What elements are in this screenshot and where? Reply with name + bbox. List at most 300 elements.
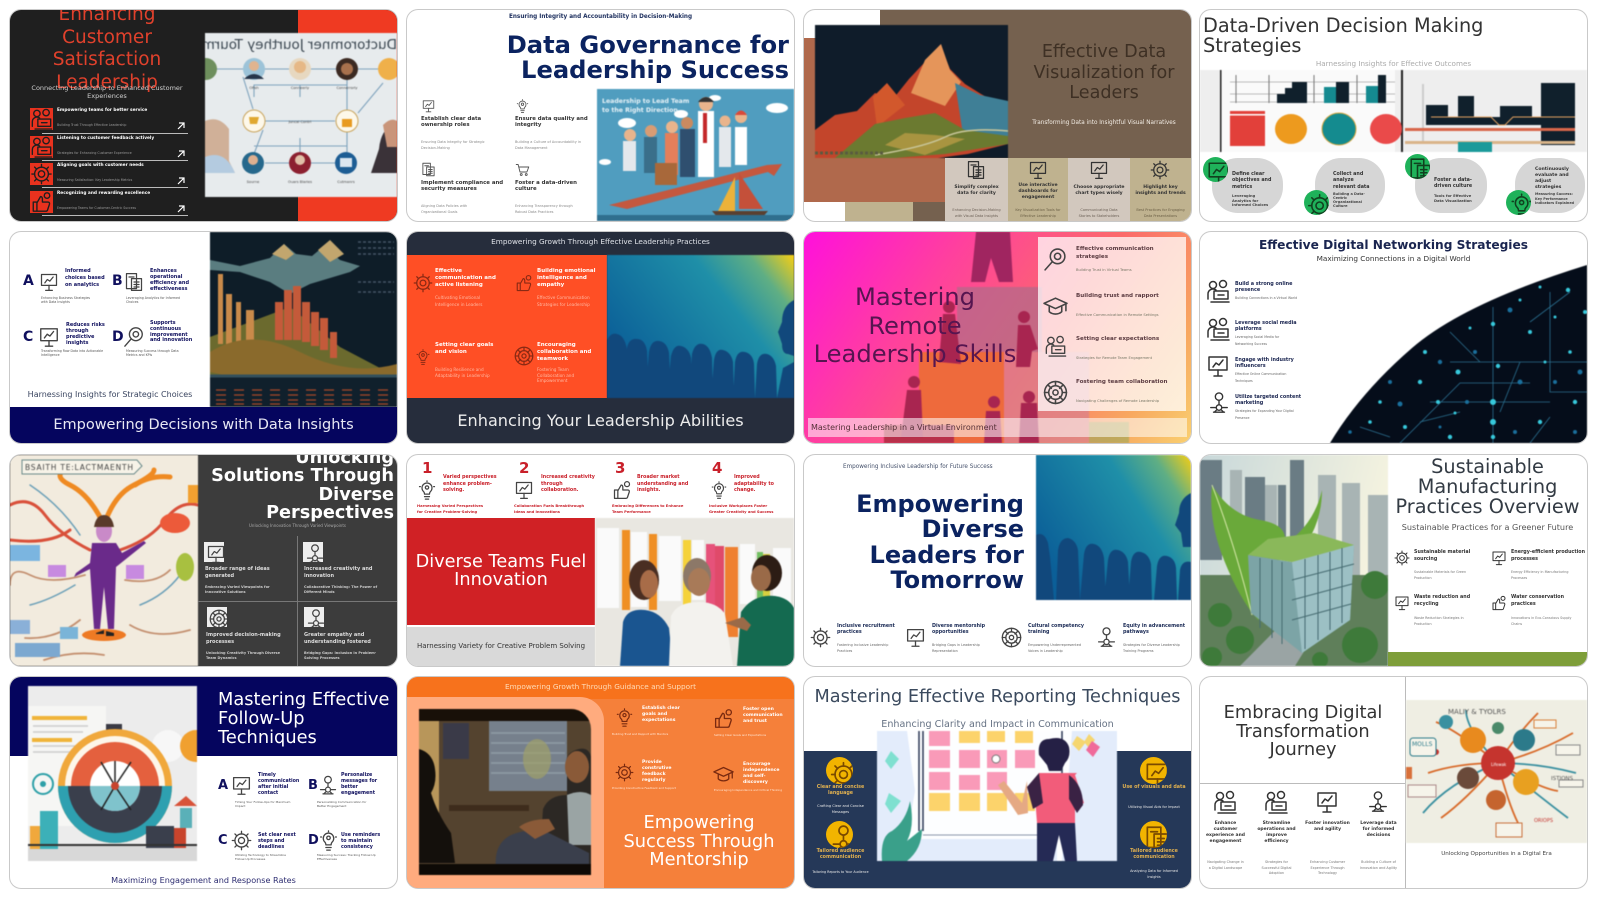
text: Follow-Up Processes [235, 857, 265, 861]
text [952, 208, 1001, 218]
heading [1353, 821, 1404, 839]
title [211, 449, 394, 522]
heading: Define clear [1232, 172, 1264, 177]
heading: Listening to customer feedback actively [57, 136, 154, 141]
text: Strategies for Expanding Your Digital [1235, 409, 1294, 413]
panel: mentorship slide [407, 677, 794, 888]
item 3 [612, 459, 700, 516]
text: Best Practices for Engaging [1136, 208, 1185, 212]
heading: through [66, 328, 89, 334]
heading: Waste reduction and [1414, 595, 1470, 600]
heading [1511, 595, 1564, 608]
heading: communication [258, 779, 299, 784]
panel: data insights slide [10, 232, 397, 443]
heading: Broader market [637, 475, 680, 480]
icon: figure [304, 607, 324, 627]
icon: magnifier [123, 326, 145, 348]
heading: Encouraging [537, 342, 576, 348]
title: Solutions Through [211, 466, 394, 486]
heading: marketing [1235, 400, 1263, 406]
heading: regularly [642, 778, 665, 783]
heading: Aligning goals with customer needs [57, 163, 144, 168]
heading: Tailored audience [1130, 849, 1178, 854]
item: data quality [515, 99, 588, 150]
text [1511, 570, 1568, 581]
image: mind map with figure [10, 455, 198, 666]
text [41, 349, 103, 357]
heading [1434, 178, 1472, 191]
text: Embracing Differences to Enhance [612, 504, 683, 508]
panel: digital transformation slide [1200, 677, 1587, 888]
item: broader range [204, 542, 294, 597]
heading: deadlines [258, 845, 284, 850]
item: content marketing [1206, 391, 1311, 423]
heading: and vision [435, 349, 467, 355]
number: 2 [519, 459, 529, 477]
chart image: dashboards [1200, 70, 1587, 152]
heading: Increased creativity [541, 475, 595, 480]
item: creativity [303, 542, 393, 597]
item: goals [612, 705, 704, 739]
text: Empowering Underrepresented [1028, 643, 1081, 647]
light photo frame [407, 697, 604, 888]
title: Leadership Skills [814, 340, 1016, 368]
heading: efficiency and [150, 280, 189, 286]
text [206, 651, 280, 661]
title: Leaders [1069, 83, 1139, 103]
heading [1235, 320, 1297, 332]
title: Tomorrow [890, 566, 1024, 594]
panel: practices list [1038, 237, 1186, 411]
icon: thumb [515, 274, 533, 292]
text: Enhancing Decision-Making [952, 208, 1001, 212]
heading [1535, 167, 1569, 191]
item C [218, 833, 303, 863]
heading: Leverage data [1360, 821, 1397, 826]
heading: Ensure data quality and [515, 116, 588, 122]
text: Effective Communication [537, 295, 590, 300]
heading: Tailored audience [817, 849, 864, 854]
text [421, 140, 485, 150]
text: Harnessing Varied Perspectives [417, 504, 483, 508]
letter: B [112, 273, 123, 289]
text [932, 643, 980, 654]
text [1200, 860, 1251, 871]
heading: active listening [435, 282, 483, 288]
heading: Establish clear [642, 706, 680, 711]
text [537, 367, 574, 384]
panel: inclusive leadership slide [804, 455, 1191, 666]
text: Indicators Explained [1535, 201, 1574, 205]
text: Effective Online Communication [1235, 372, 1286, 376]
item: key insights [1130, 158, 1191, 221]
item: leverage data [1353, 789, 1404, 881]
text [317, 800, 366, 808]
item: emotional intelligence [514, 268, 604, 308]
text [126, 349, 179, 357]
text: Analytics for [1232, 199, 1258, 203]
heading: Collect and [1333, 172, 1363, 177]
image: silhouettes on gradient [607, 255, 794, 398]
heading: Improved [734, 475, 760, 480]
text: Production [1414, 576, 1432, 580]
heading [541, 475, 595, 495]
icon: report [38, 272, 60, 292]
image: timer gauge illustration [28, 686, 197, 861]
item: define objectives [1203, 154, 1283, 213]
title: Effective Digital Networking Strategies [1259, 238, 1528, 252]
item B [112, 268, 202, 305]
text: Transforming Raw Data into Actionable [41, 349, 103, 353]
title: Mentorship [649, 849, 749, 870]
subtitle: Connecting Leadership to Enhanced Customer [31, 84, 183, 92]
heading: Set clear next [258, 833, 296, 838]
text [435, 295, 482, 308]
text [1232, 194, 1268, 208]
title: Empowering [856, 490, 1024, 518]
image: team on a sailing arrow: Leadership to Lead Team [602, 98, 689, 105]
letter: C [218, 833, 228, 848]
heading [743, 707, 783, 725]
heading: decisions [1367, 833, 1390, 838]
icon: green badge [1405, 154, 1430, 179]
text: Networking Success [1235, 342, 1267, 346]
icon: magnifier [1043, 247, 1068, 272]
heading: independence [743, 768, 779, 773]
heading: Simplify complex [954, 185, 999, 190]
heading: Cultural competency [1028, 624, 1084, 629]
heading: Greater empathy and [304, 632, 364, 638]
heading: Foster a data-driven [515, 180, 577, 186]
panel: customer satisfaction leadership slide [10, 10, 397, 221]
item: chart types [1068, 158, 1130, 221]
heading: driven culture [1434, 184, 1472, 189]
heading [341, 773, 377, 797]
item: aligning goals [30, 162, 188, 188]
title [1200, 704, 1406, 760]
image: customer journey diagram: Ofish [249, 86, 259, 90]
heading [66, 322, 105, 346]
title: Practices Overview [1396, 495, 1579, 518]
text: Organizational Goals [421, 210, 457, 214]
heading [150, 321, 192, 344]
heading: understanding fostered [304, 639, 371, 645]
icon: gear [413, 273, 433, 293]
heading: predictive [66, 334, 94, 340]
heading: data for clarity [957, 191, 996, 196]
text [1130, 207, 1191, 219]
text: Crafting Clear and Concise [817, 804, 864, 808]
heading [1076, 245, 1154, 261]
text: Techniques [1235, 379, 1253, 383]
icon: rosette [514, 346, 534, 366]
heading [1302, 821, 1353, 833]
heading: Use interactive [1018, 183, 1058, 188]
pill [1212, 158, 1283, 213]
text: Measuring Success: Tracking Follow-Up [317, 853, 376, 857]
heading: Empowering teams for better service [57, 108, 147, 113]
heading [515, 116, 588, 128]
item A [218, 773, 303, 810]
text [1511, 616, 1571, 627]
text: Ensuring Data Integrity for Strategic [421, 140, 485, 144]
text: Collaboration and [537, 372, 574, 378]
text [304, 651, 376, 661]
image: digital mind map: Lifewak [1491, 762, 1507, 767]
text: Strategies for Leadership [537, 302, 590, 306]
text: Unlocking Creativity Through Diverse [206, 651, 280, 655]
text: Building a Culture of Accountability in [515, 140, 581, 144]
text: Solving Processes [304, 656, 340, 660]
item: evaluate strategies [1506, 158, 1586, 215]
arrow [178, 122, 185, 130]
heading: chart types wisely [1075, 191, 1123, 196]
text: Measuring Success through Data [126, 349, 179, 353]
icon: bulb [615, 707, 634, 728]
title: Customer [62, 27, 152, 48]
heading: presence [1235, 287, 1260, 293]
text [1117, 869, 1191, 880]
title [53, 10, 161, 93]
heading: to maintain [341, 839, 372, 844]
text: Decision-Making [421, 146, 450, 150]
icon: gold badge figure [826, 821, 853, 848]
icon: board [422, 100, 434, 112]
heading [435, 268, 496, 288]
heading: continuous [150, 326, 181, 332]
subtitle: Maximizing Connections in a Digital World [1317, 254, 1470, 263]
text [1015, 208, 1061, 218]
heading [421, 180, 503, 192]
top band [407, 677, 794, 699]
text: Utilizing Visual Aids for Impact [1128, 805, 1180, 809]
icon: green badge [1304, 190, 1329, 215]
image: digital mind map: ORIOPS [1534, 818, 1553, 824]
heading: engagement [1022, 195, 1054, 200]
item: tailored communication left [804, 821, 877, 877]
heading [65, 268, 105, 288]
text: Choices [126, 300, 138, 304]
heading: efficiency [1264, 839, 1289, 844]
item: online presence [1206, 278, 1311, 304]
icon: rosette [615, 762, 634, 783]
text: Processes [1511, 576, 1527, 580]
heading: Setting clear expectations [1076, 336, 1159, 342]
text [304, 585, 377, 595]
title: Journey [1269, 739, 1337, 760]
text: Navigating Change in [1207, 860, 1244, 864]
text [1535, 192, 1574, 206]
text: Bridging Gaps: Inclusion in Problem- [304, 651, 376, 655]
text: Energy Efficiency in Manufacturing [1511, 570, 1568, 574]
text: Bridging Gaps in Leadership [932, 643, 980, 647]
heading: better [341, 785, 358, 790]
text: Enhancing Business Strategies [41, 296, 90, 300]
item: waste reduction [1394, 595, 1484, 629]
heading: discovery [743, 780, 768, 785]
icon: gear bulb [810, 627, 831, 648]
heading [258, 833, 296, 851]
heading [537, 268, 596, 288]
heading: generated [205, 573, 234, 579]
heading: Varied perspectives [443, 475, 497, 480]
heading: Enhance [1215, 821, 1236, 826]
item: collaboration [514, 342, 604, 390]
text: Innovative Solutions [205, 590, 246, 594]
text: Messages [832, 810, 849, 814]
text: Insights [1147, 875, 1161, 879]
heading: Setting clear goals [435, 342, 493, 348]
letter: A [23, 273, 34, 289]
text: Team Performance [612, 510, 651, 514]
heading: feedback [642, 772, 666, 777]
heading: Building emotional [537, 268, 596, 274]
text: Building a Data- [1333, 192, 1365, 196]
text: Training Programs [1123, 648, 1154, 652]
panel: remote leadership slide [804, 232, 1191, 443]
heading: Recognizing and rewarding excellence [57, 191, 150, 196]
heading: metrics [1232, 185, 1252, 190]
heading: adjust [1535, 179, 1551, 184]
image: mind map with figure: BSAITH TE:LACTMAENTH [25, 463, 133, 472]
image: digital mind map: MOLLS [1412, 741, 1433, 748]
icon: rewards [30, 191, 53, 213]
heading: collaboration. [541, 488, 578, 493]
heading [1414, 550, 1470, 563]
title: Satisfaction [53, 49, 161, 70]
heading: Equity in advancement [1123, 624, 1185, 629]
image: team at planning wall [595, 518, 794, 666]
heading: Building trust and rapport [1076, 293, 1159, 299]
panel: data governance slide [407, 10, 794, 221]
number: 3 [615, 459, 625, 477]
heading [1200, 821, 1251, 845]
image: digital mind map: ISTIONS [1551, 776, 1574, 782]
item: clear goals [412, 342, 502, 382]
item D [308, 833, 393, 863]
text: Key Performance [1535, 196, 1568, 200]
heading: insights. [637, 488, 660, 493]
text: Stories to Stakeholders [1079, 214, 1119, 218]
heading [743, 762, 779, 786]
item: empowering teams [30, 108, 188, 134]
icon: dashboard [1030, 162, 1046, 179]
icon: factory [1491, 550, 1507, 566]
text: Building Resilience and [435, 367, 484, 372]
heading: messages for [341, 779, 377, 784]
image: 3D data mountain [814, 24, 1009, 159]
heading: influencers [1235, 363, 1266, 369]
footer green bar [1388, 652, 1587, 666]
text: Different Minds [304, 590, 335, 594]
image: mentor conversation photo [419, 709, 591, 875]
heading [932, 624, 985, 636]
heading [1511, 550, 1585, 563]
top caption: Empowering Growth Through Effective Leadership Practices [491, 237, 710, 246]
text [514, 504, 584, 515]
heading: operational [150, 274, 182, 280]
text [837, 643, 888, 654]
title [1203, 16, 1483, 56]
subtitle [31, 84, 183, 100]
title: Leadership [56, 72, 158, 93]
text: Empowerment [537, 378, 568, 383]
text: Inclusive Workplaces Foster [709, 504, 767, 508]
title [1388, 457, 1587, 517]
letter: B [308, 778, 318, 793]
heading: solving. [443, 488, 464, 493]
heading: practices [837, 630, 862, 635]
text: Effective Leadership [1020, 214, 1056, 218]
title [856, 492, 1024, 593]
heading: improvement [150, 332, 188, 338]
icon: gold badge chart [1140, 757, 1167, 784]
heading: Use reminders [341, 833, 380, 838]
top band: Empowering Growth Through Guidance and Support [505, 682, 696, 691]
heading: Encourage [743, 762, 770, 767]
text [235, 853, 286, 861]
heading: Highlight key [1143, 185, 1178, 190]
text: with Data Insights [41, 300, 70, 304]
icon: gear bulb [318, 830, 339, 851]
text [1434, 194, 1472, 204]
text: Innovation and Agility [1360, 866, 1397, 870]
title: Data-Driven Decision Making [1203, 14, 1483, 36]
item: empathy [303, 607, 393, 663]
icon: goals [30, 163, 53, 185]
number: 1 [422, 459, 432, 477]
footer caption: Maximizing Engagement and Response Rates [111, 875, 296, 885]
heading [1123, 624, 1185, 636]
icon: network [1367, 790, 1389, 814]
text: Tools for Effective [1434, 194, 1471, 198]
heading: Implement compliance and [421, 180, 503, 186]
text: Experience Through [1310, 866, 1345, 870]
heading [1073, 184, 1125, 196]
icon: gear [231, 830, 252, 851]
item: dashboards [1008, 158, 1068, 221]
heading: and innovation [150, 337, 192, 343]
text [421, 204, 467, 214]
subtitle: Harnessing Insights for Effective Outcomes [1316, 59, 1471, 68]
text: Greater Creativity and Success [709, 510, 773, 514]
heading: pathways [1123, 630, 1149, 635]
icon: bulb team [417, 480, 437, 500]
navy lower panel [804, 751, 1191, 888]
text: Impact [235, 804, 245, 808]
heading: culture [515, 186, 537, 192]
icon: people [1206, 317, 1230, 341]
divider lines [1405, 677, 1406, 888]
item: data-driven culture [1405, 154, 1487, 213]
title: Enhancing Your Leadership Abilities [457, 411, 744, 430]
title: Mastering [855, 283, 975, 311]
text: Enhancing Transparency through [515, 204, 573, 208]
heading: communication [1133, 855, 1175, 860]
heading: experience and [1206, 833, 1245, 838]
eyebrow text: Ensuring Integrity and Accountability in Decision-Making [509, 14, 692, 20]
heading [734, 475, 774, 495]
heading: Personalize [341, 773, 372, 778]
heading: construtive [642, 766, 672, 771]
text: Fostering Inclusive Leadership [837, 643, 888, 647]
letter: D [112, 329, 124, 345]
text: Adaptability in Leadership [435, 373, 490, 378]
item: water conservation [1491, 595, 1585, 629]
heading: platforms [1235, 326, 1262, 332]
heading: Foster open [743, 707, 774, 712]
panel: sustainable manufacturing slide [1200, 455, 1587, 666]
